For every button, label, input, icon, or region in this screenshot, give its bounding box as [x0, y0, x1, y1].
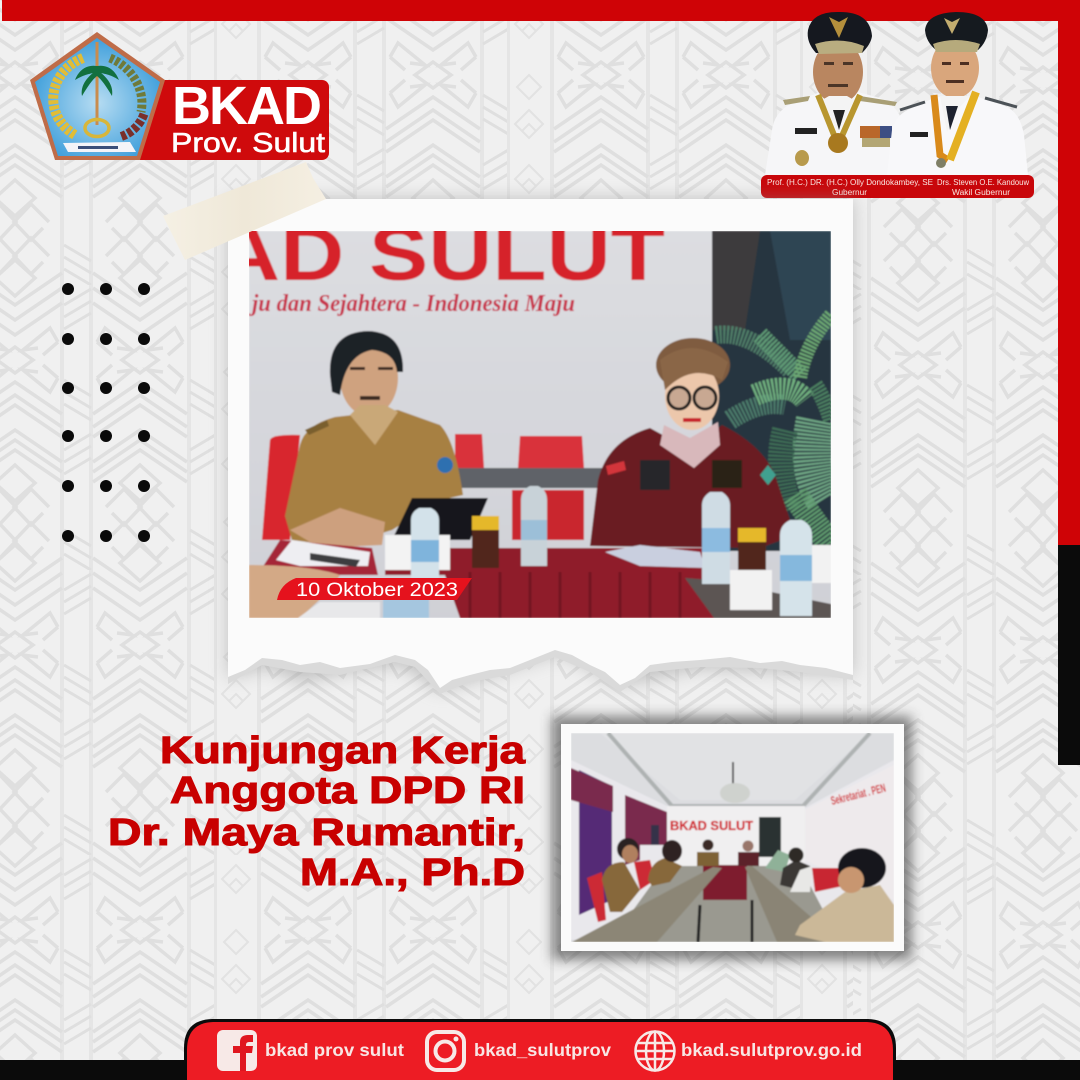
photo wall tagline: ju dan Sejahtera - Indonesia Maju — [248, 291, 575, 317]
footer contact panel — [184, 1019, 896, 1080]
title — [108, 730, 526, 894]
name: vice governor: Drs. Steven O.E. Kandouw — [937, 177, 1030, 187]
title line 3: Dr. Maya Rumantir, — [108, 812, 525, 854]
website address: bkad.sulutprov.go.id — [681, 1040, 862, 1060]
right red bar — [1058, 0, 1080, 545]
logo: BKAD Prov. Sulut — [30, 32, 329, 160]
back table skirt — [703, 865, 747, 900]
woman in maroon jacket — [590, 338, 795, 548]
small photo side wall sign: Sekretariat . PEN — [829, 781, 887, 808]
icon: facebook — [217, 1030, 257, 1071]
dark window and plant — [712, 231, 831, 551]
name: governor: Prof. (H.C.) DR. (H.C.) Olly Dondokambey, SE — [767, 177, 933, 187]
curtains — [571, 768, 781, 915]
card shadow — [228, 199, 853, 690]
instagram handle: bkad_sulutprov — [474, 1040, 611, 1060]
main photo card — [163, 162, 853, 694]
man in khaki uniform — [285, 331, 463, 548]
adhesive tape — [163, 162, 326, 260]
brand name BKAD: BKAD — [172, 76, 322, 136]
back table and chairs — [262, 434, 604, 540]
ceiling lamp — [720, 762, 750, 803]
portrait: vice governor — [887, 12, 1028, 175]
small photo wall sign: BKAD SULUT — [670, 818, 753, 833]
name plate — [761, 175, 1034, 198]
icon: provincial crest — [30, 32, 165, 160]
role: governor: Gubernur — [832, 188, 867, 197]
title line 1: Kunjungan Kerja — [160, 730, 526, 772]
floor — [634, 864, 823, 942]
officials portrait group — [761, 12, 1034, 198]
title line 4: M.A., Ph.D — [300, 852, 525, 894]
secondary card frame — [561, 724, 904, 951]
secondary card shadow — [552, 716, 912, 960]
secondary photo: meeting room — [571, 733, 894, 942]
top red bar — [2, 0, 1080, 21]
role: vice governor: Wakil Gubernur — [952, 188, 1010, 197]
right black bar — [1058, 545, 1080, 765]
decorative dot grid — [62, 283, 150, 542]
conference tables — [572, 866, 840, 942]
brand subtitle: Prov. Sulut — [171, 127, 325, 158]
date badge: 10 Oktober 2023 — [296, 579, 458, 601]
icon: instagram — [427, 1032, 464, 1070]
secondary photo card — [552, 716, 912, 960]
table items — [383, 486, 831, 618]
torn paper under layer — [228, 199, 853, 694]
bottom black bar — [0, 1060, 1080, 1080]
facebook handle: bkad prov sulut — [265, 1040, 404, 1060]
title line 2: Anggota DPD RI — [170, 770, 525, 812]
main photo: meeting with Dr. Maya Rumantir — [216, 212, 831, 618]
torn paper card — [228, 199, 853, 688]
portrait: governor — [765, 12, 912, 175]
table with red skirt — [249, 498, 831, 618]
attendees — [587, 838, 894, 942]
icon: globe — [635, 1031, 675, 1071]
red name plate — [139, 80, 329, 160]
photo wall sign: AD SULUT — [216, 212, 665, 297]
